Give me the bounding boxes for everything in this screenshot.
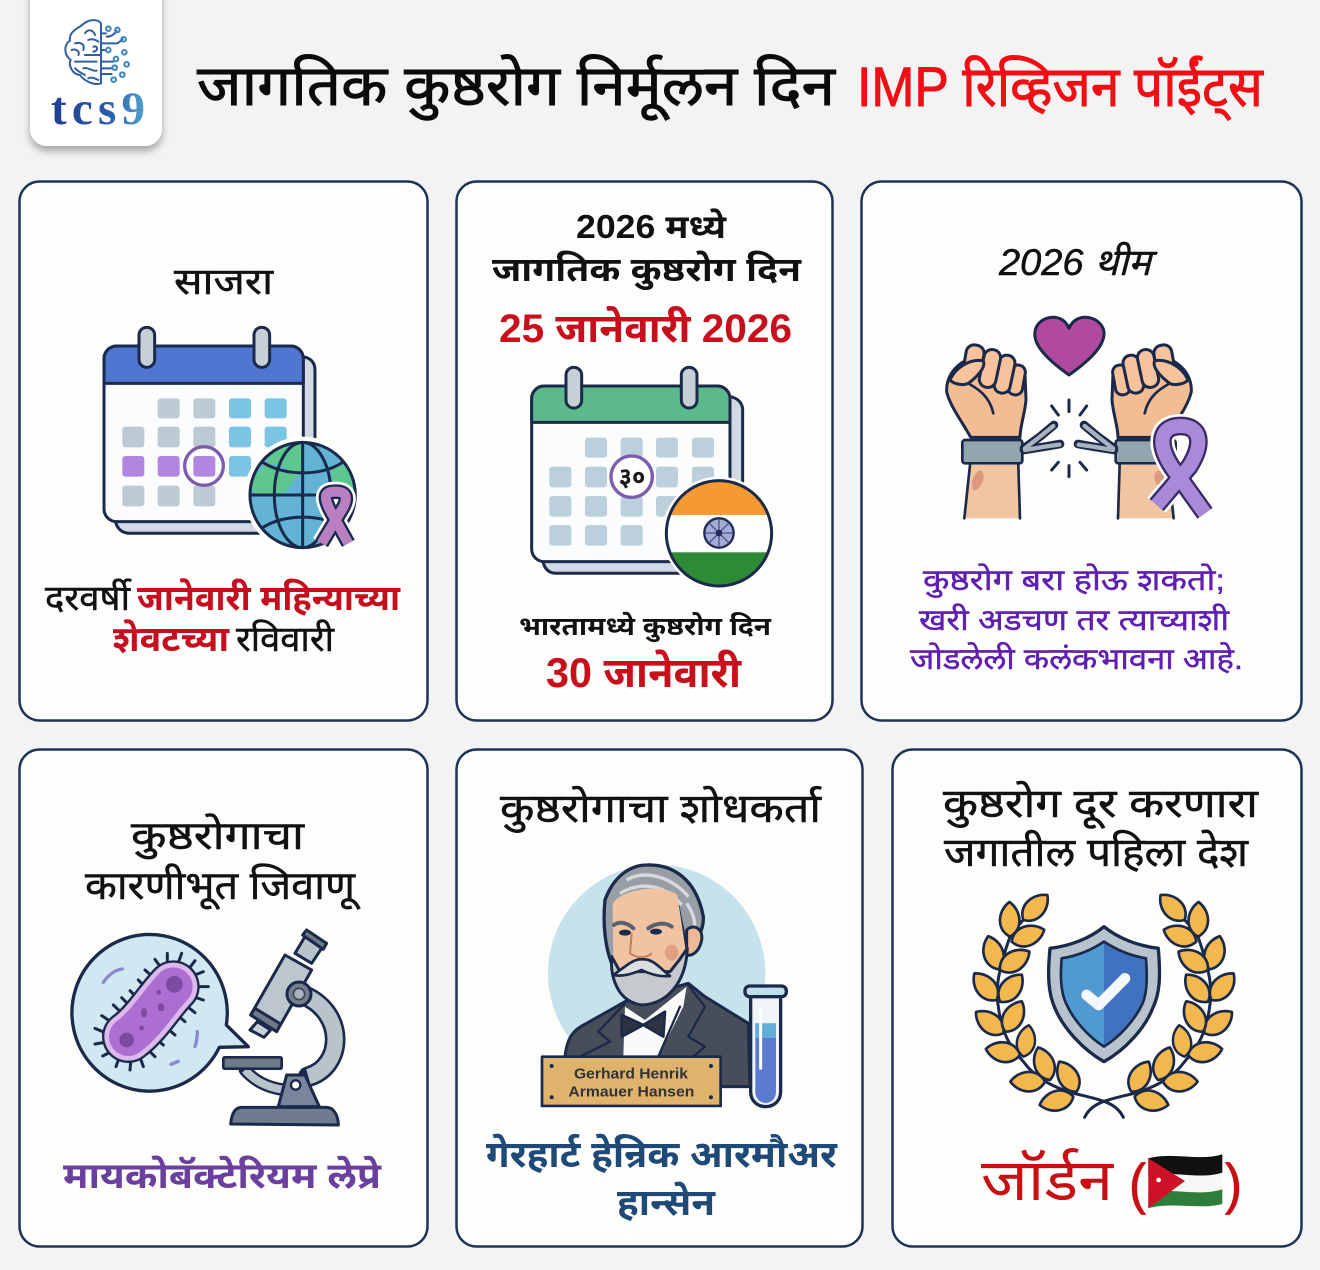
icon: jordan flag	[1148, 1154, 1222, 1208]
icon: broken chains, heart and ribbon	[947, 317, 1205, 518]
text: theme line 2: खरी अडचण तर त्याच्याशी	[919, 603, 1230, 637]
icon: magnified bacterium bubble	[72, 934, 248, 1091]
plate name line 1: Gerhard Henrik	[574, 1066, 689, 1082]
panel: 2026 date	[456, 182, 832, 720]
title black part: जागतिक कुष्ठरोग निर्मूलन दिन	[197, 54, 836, 121]
name plate	[542, 1057, 721, 1106]
panel: first country	[892, 750, 1302, 1246]
jacket	[565, 983, 750, 1087]
plate name line 2: Armauer Hansen	[568, 1085, 694, 1101]
heading: साजरा	[174, 261, 275, 302]
discoverer name line 2: हान्सेन	[617, 1181, 716, 1223]
logo	[30, 0, 162, 146]
icon: microscope	[223, 930, 338, 1125]
logo wordmark: tcs9	[51, 83, 145, 135]
title red part: IMP रिव्हिजन पॉईंट्स	[857, 55, 1264, 122]
india date: 30 जानेवारी	[546, 649, 742, 696]
icon: brain circuit	[65, 20, 129, 84]
date 30: ३०	[619, 461, 645, 491]
icon: bacterium and microscope	[72, 930, 338, 1125]
icon: test tube	[745, 986, 786, 1107]
panel: bacterium	[20, 750, 428, 1246]
panel: 2026 theme	[862, 182, 1302, 720]
text: every year: दरवर्षी	[45, 578, 132, 618]
icon: portrait of hansen	[542, 865, 786, 1107]
icon: shield	[1049, 927, 1160, 1062]
text: last: शेवटच्या	[113, 619, 230, 659]
icon: heart	[1035, 317, 1104, 375]
face	[613, 889, 687, 970]
opening bracket: (	[1129, 1152, 1146, 1215]
discoverer name line 1: गेरहार्ट हेन्रिक आरमौअर	[486, 1133, 838, 1175]
country name: जॉर्डन	[981, 1148, 1114, 1213]
panel: celebrated	[20, 182, 428, 720]
heading line 2: जागतिक कुष्ठरोग दिन	[492, 251, 802, 291]
heading: कुष्ठरोगाचा शोधकर्ता	[500, 786, 822, 832]
heading line 2: कारणीभूत जिवाणू	[85, 864, 361, 910]
heading line 1: कुष्ठरोगाचा	[131, 814, 305, 859]
text: sunday: रविवारी	[236, 619, 335, 659]
icon: calendar with indian flag	[532, 367, 777, 590]
icon: calendar with globe and ribbon	[104, 327, 361, 553]
panel: discoverer	[456, 750, 862, 1246]
heading: 2026 थीम	[998, 241, 1158, 283]
icon: laurel wreath and shield	[967, 888, 1241, 1117]
title	[197, 54, 1264, 122]
text: theme line 1: कुष्ठरोग बरा होऊ शकतो;	[923, 563, 1225, 598]
text: month highlight: जानेवारी महिन्याच्या	[137, 578, 401, 618]
heading line 1: 2026 मध्ये	[576, 207, 727, 245]
india label: भारतामध्ये कुष्ठरोग दिन	[519, 611, 772, 642]
heading line 2: जगातील पहिला देश	[944, 830, 1249, 875]
text: theme line 3: जोडलेली कलंकभावना आहे.	[910, 641, 1243, 676]
hair	[604, 865, 703, 963]
bacterium name: मायकोबॅक्टेरियम लेप्रे	[63, 1154, 382, 1196]
heading line 1: कुष्ठरोग दूर करणारा	[943, 781, 1259, 829]
beard	[611, 948, 687, 1005]
world date: 25 जानेवारी 2026	[499, 306, 792, 351]
closing bracket: )	[1225, 1152, 1242, 1215]
